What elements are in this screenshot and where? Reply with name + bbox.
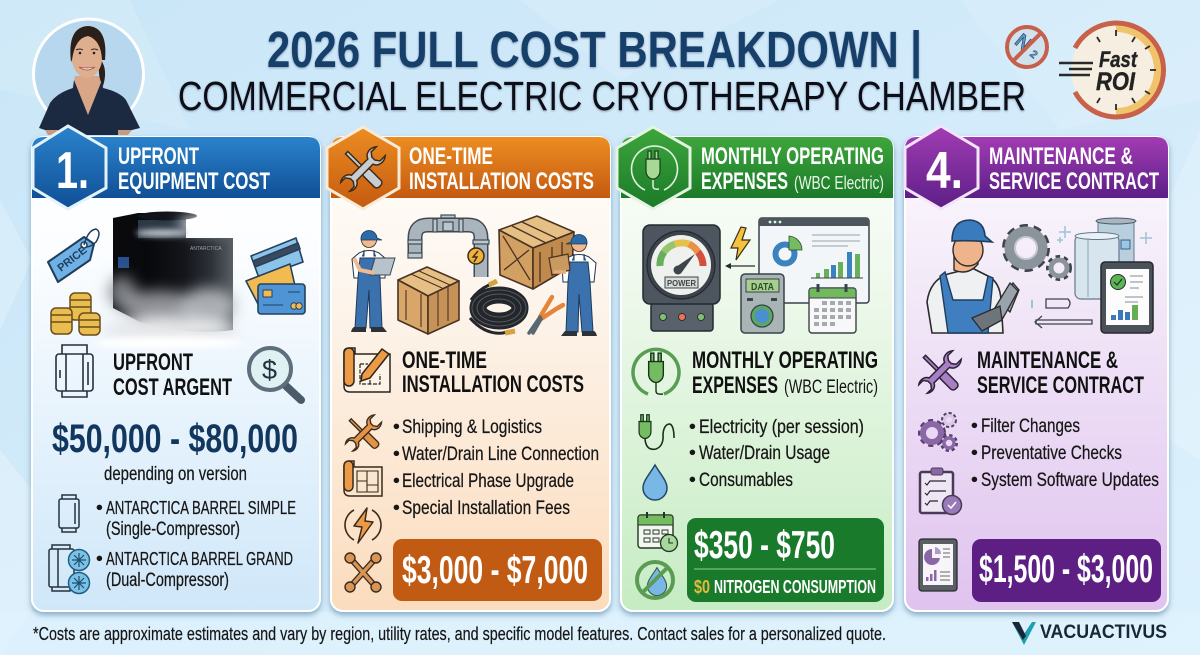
large gear [1007,229,1045,267]
icon: price tag [48,229,99,282]
card 4 body [905,137,1168,611]
icon: tools orange [344,414,383,452]
illustration: installation scene [351,215,597,336]
icon: magnifier with dollar [249,348,301,400]
subheading: upfront cost argent [113,349,232,401]
badge: no nitrogen: N [1010,30,1036,56]
list: monthly items: Electricity (per session) [699,416,864,438]
icon: magnifier with dollar: $ [262,355,277,385]
list: monthly items: Water/Drain Usage [699,442,830,464]
card 2 header: INSTALLATION COSTS [409,168,594,195]
analytics dashboard [759,218,869,303]
subheading: monthly: (WBC Electric) [784,377,878,398]
title line 1: 2026 FULL COST BREAKDOWN | [267,21,922,79]
list: installation items: Special Installation Fees [402,497,570,519]
icon: gears [921,414,956,450]
hose coil [470,281,526,333]
price box: monthly: NITROGEN CONSUMPTION [714,577,876,597]
subheading: monthly: EXPENSES [692,372,778,399]
subheading: monthly: MONTHLY OPERATING [692,347,878,374]
list: maintenance items: • [971,469,978,491]
list item: barrel grand: (Dual-Compressor) [106,569,229,591]
subheading: installation: INSTALLATION COSTS [402,371,584,398]
note: depending on version: depending on version [104,463,247,485]
icon: coins [51,293,100,335]
icon: credit cards [246,238,305,314]
list: installation items: Water/Drain Line Connection [402,443,599,465]
list item: barrel simple [96,497,296,540]
panel: maintenance and service contract [905,126,1168,611]
card 2 header [331,137,610,198]
lightning and arrow [725,227,755,269]
subheading: installation: ONE-TIME [402,347,487,374]
card 3 header [621,137,893,198]
icon: tools purple [917,349,963,395]
badge: fast ROI clock: Fast [1099,47,1138,72]
icon: checklist [920,468,962,514]
price box: installation: $3,000 - $7,000 [402,549,588,592]
card 3 header: (WBC Electric) [794,173,884,193]
tablet report [1101,262,1153,333]
technician [927,220,1019,333]
card 3 header: MONTHLY OPERATING [701,143,884,170]
list: installation items: Shipping & Logistics [402,416,542,438]
list item: barrel simple: ANTARCTICA BARREL SIMPLE [106,497,296,518]
list: installation items: Electrical Phase Upgrade [402,470,574,492]
price box: installation [393,539,602,601]
list: maintenance items: • [971,442,978,464]
list: installation items: • [393,416,400,438]
icon: tablet chart [919,539,957,591]
list item: barrel grand [96,548,293,591]
badge: fast ROI clock [1059,23,1164,117]
list item: barrel grand: ANTARCTICA BARREL GRAND [106,548,293,569]
panel: one-time installation costs [327,127,610,611]
panel: upfront equipment cost [32,126,320,611]
card 4 header [905,137,1168,198]
list: monthly items: • [689,442,696,464]
icon: plug with cord [639,415,674,449]
footnote: *Costs are approximate estimates and vary by region, utility rates, and specific model features. Contact sales for a personalized quote. [33,624,886,644]
price box: monthly: $0 [694,577,710,597]
step badge 3: plug [617,127,690,209]
subheading: upfront cost argent: COST ARGENT [113,374,232,401]
step badge 1: 1. [56,142,89,200]
icon: blueprint and pencil [344,348,390,392]
chamber photo: ANTARCTICA [190,246,222,252]
card 1 header: EQUIPMENT COST [118,168,270,195]
icon: no nitrogen drop [637,562,673,598]
list: installation items: • [393,443,400,465]
large crate [499,216,574,289]
list: installation items [393,416,599,519]
card 1 body [32,137,320,611]
card 3 body [621,137,893,611]
power meter: POWER [667,279,696,288]
icon: single barrel [59,495,79,532]
step badge 4: 4. [926,142,963,200]
subheading: upfront cost argent: UPFRONT [113,349,193,376]
list item: barrel simple: • [96,497,103,519]
icon: plug in circle [633,349,679,394]
card 1 header [32,137,320,198]
list: maintenance items: Preventative Checks [981,442,1122,464]
list: installation items: • [393,497,400,519]
data device [741,274,784,333]
worker with tablet [351,230,395,332]
small crate [398,267,459,334]
logo: vacuactivus: VACUACTIVUS [1040,622,1167,643]
illustration: power meter and dashboard [643,218,869,333]
avatar: staff portrait [34,19,144,135]
icon: chamber outline [56,345,93,397]
subheading: installation [402,347,584,398]
small gear [1049,258,1069,278]
badge: no nitrogen: 2 [1027,48,1040,61]
icon: grand barrel with compressors [49,545,90,594]
list: installation items: • [393,470,400,492]
list: monthly items: • [689,416,696,438]
data device: DATA [751,282,774,293]
list item: barrel simple: (Single-Compressor) [106,518,240,540]
list: maintenance items: System Software Updates [981,469,1159,491]
badge: fast ROI clock: ROI [1096,68,1136,96]
price box: monthly [687,518,884,602]
step badge 4 [905,126,978,209]
subheading: maintenance: MAINTENANCE & [977,347,1118,374]
icon: water drop [643,465,667,500]
power meter [643,225,720,331]
step badge 2: tools [327,127,399,209]
calendar [809,284,856,333]
list item: barrel grand: • [96,548,103,570]
chamber photo [94,212,242,349]
icon: price tag: PRICE [55,244,89,274]
price: upfront range: $50,000 - $80,000 [52,417,298,461]
subheading: maintenance [977,347,1144,399]
worker with box [549,234,597,336]
icon: wrenches [345,553,381,592]
price box: monthly: $350 - $750 [694,524,835,567]
list: maintenance items: • [971,415,978,437]
wrench and part [1032,299,1092,328]
illustration: service technician [927,218,1153,333]
list: monthly items [689,416,864,491]
list: maintenance items [971,415,1159,491]
card 2 body [331,137,610,611]
pliers [529,297,563,333]
icon: floor plan [344,461,382,496]
step badge 1 [33,126,106,209]
badge: no nitrogen [1007,27,1047,67]
icon: lightning circle [345,508,381,543]
pipe with valve [408,215,489,277]
price box: maintenance [972,539,1161,602]
icon: calendar clock [638,512,678,552]
subheading: monthly [692,347,878,399]
card 3 header: EXPENSES [701,168,788,195]
title line 2: COMMERCIAL ELECTRIC CRYOTHERAPY CHAMBER [178,73,1026,119]
card 2 header: ONE-TIME [409,143,493,170]
card 1 header: UPFRONT [118,143,199,170]
list: monthly items: Consumables [699,469,793,491]
title [178,21,1026,119]
list: maintenance items: Filter Changes [981,415,1080,437]
panel: monthly operating expenses [617,127,893,611]
card 4 header: MAINTENANCE & [989,143,1133,170]
list: monthly items: • [689,469,696,491]
chamber drawing [1057,218,1152,299]
